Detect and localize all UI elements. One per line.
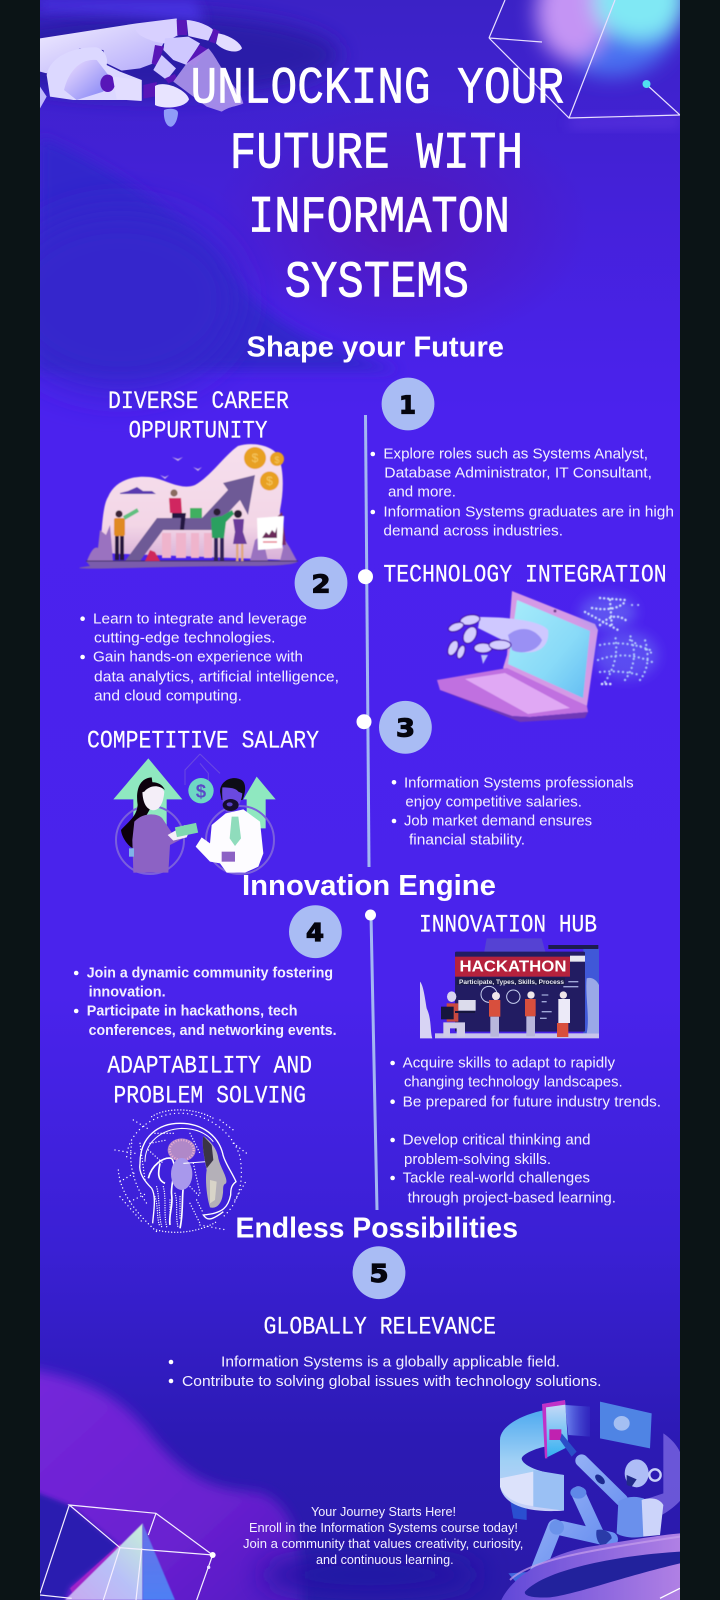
illustration: career growth: $ <box>266 474 273 488</box>
bullets: community <box>74 966 337 1039</box>
illustration: competitive salary <box>113 754 276 874</box>
bullets: technology: and cloud computing. <box>94 689 242 705</box>
bullets: technology: cutting-edge technologies. <box>94 631 276 647</box>
bullets: community: Join a dynamic community fostering <box>87 966 333 982</box>
text: call to action: Enroll in the Information Systems course today! <box>249 1521 518 1535</box>
bullets: salary: enjoy competitive salaries. <box>405 795 582 811</box>
bullets: global <box>169 1355 601 1390</box>
timeline: upper line <box>356 415 373 867</box>
ribbon screens <box>500 1400 652 1511</box>
bullets: technology: data analytics, artificial intelligence, <box>94 669 339 685</box>
badge: 2: 2 <box>312 570 330 598</box>
illustration: career growth: $ <box>252 451 259 465</box>
bullets: adaptability: Tackle real-world challenges <box>403 1171 590 1187</box>
bullets: community: Participate in hackathons, tech <box>87 1004 298 1020</box>
badge: 1 <box>382 378 434 430</box>
bullets: career: Explore roles such as Systems Analyst, <box>383 446 648 462</box>
bullets: adaptability: through project-based learning. <box>408 1191 616 1207</box>
icon: robot hand top left <box>40 18 243 127</box>
image: hackathon poster: HACKATHON <box>460 959 566 976</box>
heading: Competitive Salary: COMPETITIVE SALARY <box>87 726 319 755</box>
person: red shirt seated <box>169 489 202 530</box>
image: hackathon poster <box>420 938 599 1038</box>
heading: Diverse Career Oppurtunity: OPPURTUNITY <box>128 416 268 445</box>
illustration: career growth <box>79 444 298 569</box>
badge: 3 <box>379 701 432 754</box>
bullets: salary <box>392 775 634 849</box>
bullets: salary: financial stability. <box>409 833 525 849</box>
person: woman <box>233 510 247 561</box>
illustration: robot with holographic screens <box>500 1400 683 1600</box>
heading: Diverse Career Oppurtunity <box>108 387 289 445</box>
badge: 4 <box>289 905 342 958</box>
bullets: technology <box>80 611 339 705</box>
badge: 3: 3 <box>396 714 415 742</box>
badge: 2 <box>295 557 347 609</box>
bullets: adaptability: changing technology landscapes. <box>404 1075 623 1091</box>
badge: 4: 4 <box>306 918 324 947</box>
bullets: global: Contribute to solving global issues with technology solutions. <box>182 1374 602 1390</box>
bullets: career: Database Administrator, IT Consultant, <box>384 466 652 482</box>
robot body <box>508 1459 663 1585</box>
illustration: laptop with robot hand <box>437 591 658 722</box>
person: orange shirt <box>114 510 138 560</box>
bullets: adaptability: Be prepared for future industry trends. <box>403 1095 661 1111</box>
illustration: career growth: $ <box>274 455 280 465</box>
icon: glowing cube top right <box>489 0 686 128</box>
heading: Technology Integration: TECHNOLOGY INTEGRATION <box>383 561 667 590</box>
heading: Adaptability and Problem Solving: ADAPTABILITY AND <box>107 1051 312 1080</box>
bullets: career: demand across industries. <box>383 524 563 540</box>
icon: glowing cube bottom left <box>30 1490 216 1600</box>
image: hackathon poster: Participate, Types, Skills, Process <box>459 979 564 986</box>
title <box>190 60 564 313</box>
heading: Endless Possibilities: Endless Possibilities <box>236 1212 518 1244</box>
platform <box>500 1533 680 1600</box>
woman <box>121 777 198 873</box>
bullets: career <box>370 446 674 540</box>
desk person <box>441 991 476 1037</box>
title: FUTURE WITH <box>230 125 523 184</box>
text: call to action: and continuous learning. <box>316 1553 454 1567</box>
title: SYSTEMS <box>285 254 469 313</box>
chart board <box>257 516 284 550</box>
heading: Shape your Future: Shape your Future <box>246 332 504 364</box>
bullets: career: Information Systems graduates are in high <box>383 505 674 521</box>
person: green shirt <box>211 508 234 561</box>
standing people <box>489 992 500 1037</box>
timeline: lower line <box>365 910 377 1210</box>
bullets: community: conferences, and networking events. <box>89 1023 337 1039</box>
bullets: technology: Gain hands-on experience with <box>93 650 303 666</box>
bullets: community: innovation. <box>89 985 166 1001</box>
robot back leg and ring behind <box>510 1433 683 1521</box>
text: call to action: Join a community that values creativity, curiosity, <box>243 1537 523 1551</box>
bullets: adaptability: problem-solving skills. <box>404 1152 551 1168</box>
illustration: brain and head <box>115 1110 247 1232</box>
heading: Adaptability and Problem Solving <box>107 1051 312 1110</box>
bullets: salary: Information Systems professionals <box>404 775 634 791</box>
bullets: global: Information Systems is a globally applicable field. <box>221 1355 560 1371</box>
text: call to action <box>243 1505 523 1567</box>
illustration: competitive salary: $ <box>196 780 207 801</box>
bullets: adaptability: Develop critical thinking and <box>403 1133 590 1149</box>
bullets: adaptability <box>390 1056 661 1207</box>
bullets: adaptability: Acquire skills to adapt to rapidly <box>403 1056 616 1072</box>
badge: 5: 5 <box>370 1259 388 1288</box>
text: call to action: Your Journey Starts Here! <box>311 1505 456 1519</box>
bullets: salary: Job market demand ensures <box>404 814 592 830</box>
badge: 1: 1 <box>399 390 416 420</box>
heading: Diverse Career Oppurtunity: DIVERSE CAREER <box>108 387 289 416</box>
bullets: technology: Learn to integrate and leverage <box>93 611 307 627</box>
heading: Globally Relevance: GLOBALLY RELEVANCE <box>264 1313 496 1342</box>
bullets: career: and more. <box>388 485 456 501</box>
title: INFORMATON <box>248 189 510 248</box>
badge: 5 <box>353 1246 405 1299</box>
heading: Adaptability and Problem Solving: PROBLEM SOLVING <box>113 1081 306 1110</box>
title: UNLOCKING YOUR <box>190 60 564 119</box>
heading: Innovation Engine: Innovation Engine <box>242 870 496 902</box>
heading: Innovation Hub: INNOVATION HUB <box>419 911 597 940</box>
man <box>196 778 263 873</box>
